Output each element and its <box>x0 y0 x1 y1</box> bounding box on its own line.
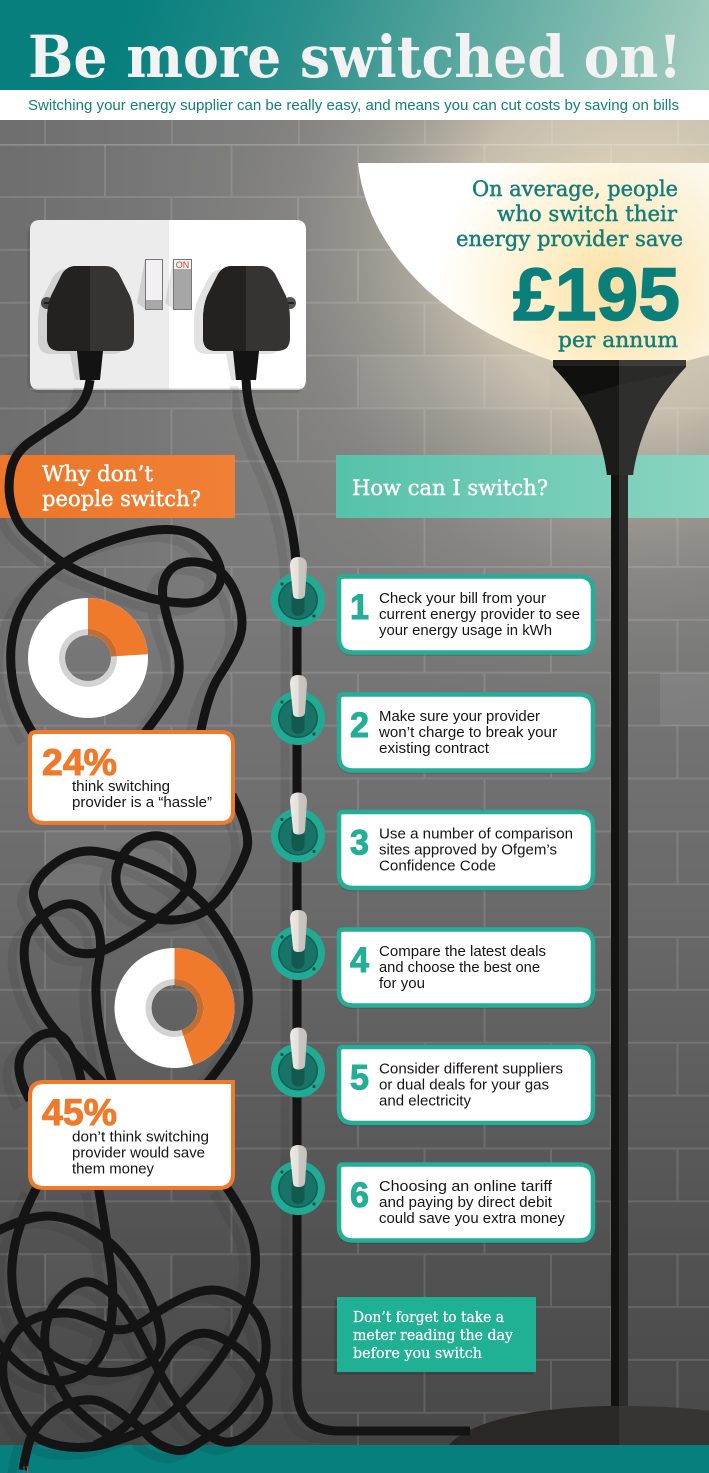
stat caption: provider is a “hassle” <box>72 795 212 811</box>
step 5: and electricity <box>379 1094 472 1110</box>
footer band <box>0 1445 709 1473</box>
stat caption: don’t think switching <box>72 1130 209 1146</box>
header banner <box>0 0 709 91</box>
step 4: Compare the latest deals <box>379 944 546 960</box>
step 3: Use a number of comparison <box>379 826 573 842</box>
step 1 <box>337 576 593 656</box>
why don't people switch banner: Why don’t <box>42 462 153 487</box>
right plug <box>203 266 290 380</box>
step 4 <box>337 930 593 1009</box>
step 3: 3 <box>350 824 369 862</box>
exposed wire ends <box>24 1466 28 1473</box>
step 5: 5 <box>350 1058 369 1098</box>
floor lamp <box>449 360 709 1445</box>
step 2 <box>337 694 593 774</box>
stat caption: provider would save <box>72 1146 205 1162</box>
step 2: Make sure your provider <box>379 709 540 725</box>
toggle switch 1 <box>271 557 325 627</box>
step 5 <box>337 1047 593 1126</box>
left rocker switch <box>137 259 162 310</box>
step 6 <box>337 1164 593 1244</box>
step 1: Check your bill from your <box>379 591 546 607</box>
step 1: 1 <box>350 588 369 627</box>
step 5: or dual deals for your gas <box>379 1078 549 1094</box>
step 4: for you <box>379 976 425 992</box>
stat figure: 45% <box>42 1092 117 1133</box>
plug shadows <box>38 269 281 380</box>
cord shadows <box>0 386 458 1473</box>
step 6: could save you extra money <box>379 1211 566 1227</box>
stat box: 45% <box>30 1082 233 1188</box>
stat caption: think switching <box>72 779 170 795</box>
toggle switch 3 <box>271 792 325 862</box>
meter reading reminder note: Don’t forget to take a <box>353 1310 504 1326</box>
right rocker switch: ON <box>176 260 189 270</box>
step 3 <box>337 812 593 892</box>
savings statement: On average, people <box>472 177 678 201</box>
step 2: existing contract <box>379 741 489 757</box>
per annum label: per annum <box>558 328 678 352</box>
step 4: and choose the best one <box>379 960 540 976</box>
lamp light with savings callout <box>358 163 709 361</box>
step 3: sites approved by Ofgem’s <box>379 842 557 858</box>
stat figure: 24% <box>42 742 117 783</box>
step 3: Confidence Code <box>379 858 496 874</box>
step 1: your energy usage in kWh <box>379 623 552 639</box>
donut chart: 45% <box>114 948 234 1068</box>
left screw <box>41 297 53 309</box>
savings statement <box>456 177 683 251</box>
subtitle strip: Switching your energy supplier can be really easy, and means you can cut costs by saving on bills <box>28 98 679 114</box>
step 1: current energy provider to see <box>379 607 580 623</box>
subtitle strip <box>0 90 709 120</box>
stat caption <box>72 779 212 811</box>
right screw <box>284 297 296 309</box>
why don't people switch banner: people switch? <box>42 487 201 512</box>
stat box: 24% <box>30 732 233 823</box>
step 6: and paying by direct debit <box>379 1195 552 1211</box>
step 6: 6 <box>350 1176 369 1215</box>
stat caption <box>72 1130 209 1178</box>
savings statement: who switch their <box>497 202 678 226</box>
how can I switch banner: How can I switch? <box>352 476 548 500</box>
step 2: won’t charge to break your <box>378 725 557 741</box>
meter reading reminder note <box>334 1297 536 1375</box>
savings statement: energy provider save <box>456 227 683 251</box>
donut chart: 24% <box>28 598 148 718</box>
step 2: 2 <box>350 706 369 745</box>
step 6: Choosing an online tariff <box>379 1179 553 1195</box>
why don't people switch banner <box>0 455 235 518</box>
tangled left cord <box>0 380 268 1470</box>
left plug <box>47 266 134 380</box>
meter reading reminder note: before you switch <box>353 1346 482 1362</box>
right rocker switch <box>165 259 192 310</box>
toggle switch 5 <box>271 1028 325 1098</box>
stat caption: them money <box>72 1162 155 1178</box>
step 5: Consider different suppliers <box>379 1062 563 1078</box>
meter reading reminder note: meter reading the day <box>353 1328 514 1344</box>
step 4: 4 <box>350 941 370 980</box>
toggle switch 4 <box>271 910 325 980</box>
toggle switch 2 <box>271 675 325 745</box>
how can I switch banner <box>336 455 709 518</box>
savings figure: £195 <box>513 253 680 336</box>
toggle switch 6 <box>271 1145 325 1215</box>
double wall socket <box>27 220 306 393</box>
right cord with toggle switches path <box>246 378 470 1431</box>
